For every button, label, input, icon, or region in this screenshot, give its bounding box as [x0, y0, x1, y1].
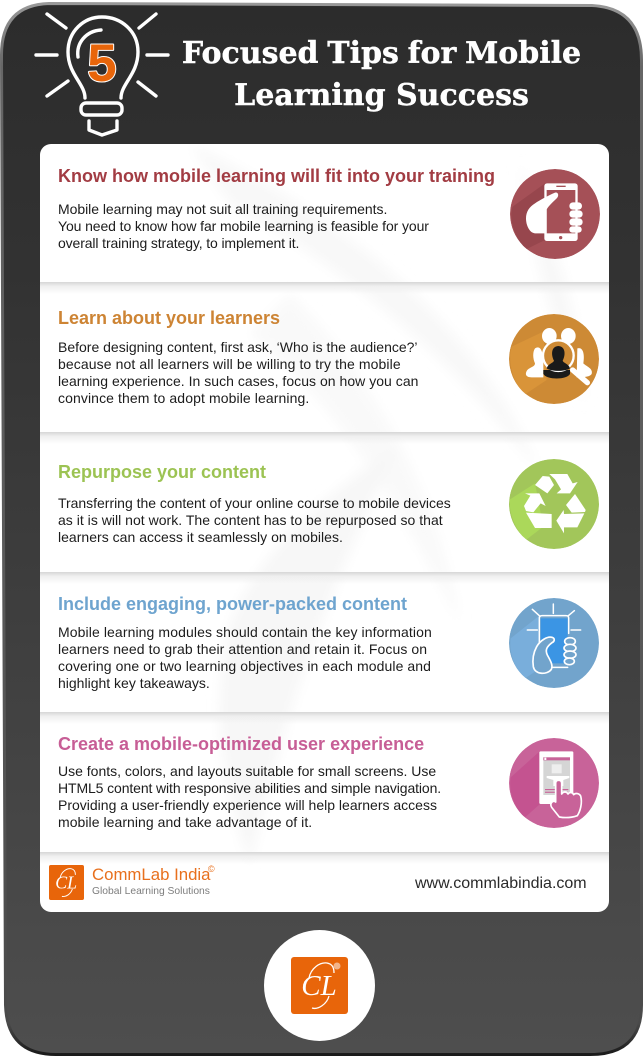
heading: tip 2: Learn about your learners — [58, 308, 280, 328]
heading: tip 1: Know how mobile learning will fit into your training — [58, 166, 495, 186]
text: tip 5: HTML5 content with responsive abilities and simple navigation. — [58, 780, 441, 796]
text: tip 3: learners can access it seamlessly on mobiles. — [58, 529, 343, 545]
panel: tip 3 — [58, 462, 451, 545]
title: Focused Tips for Mobile — [182, 36, 581, 71]
icon: light bulb with number 5 — [34, 12, 170, 137]
text: tip 1 — [58, 201, 429, 251]
icon: recycle — [509, 459, 599, 549]
company name: CommLab India — [92, 865, 210, 884]
text: tip 5: Providing a user-friendly experience will help learners access — [58, 797, 437, 813]
text: tip 4: highlight key takeaways. — [58, 675, 210, 691]
icon: light bulb with number 5: 5 — [87, 34, 117, 93]
text: tip 3 — [58, 495, 451, 545]
tagline: Global Learning Solutions — [92, 886, 210, 897]
home button with logo: CL — [301, 970, 337, 1002]
text: tip 2: convince them to adopt mobile learning. — [58, 390, 309, 406]
logo mark: CL — [55, 872, 77, 892]
icon: hand holding phone — [510, 169, 600, 259]
footer logo — [49, 864, 215, 900]
text: tip 2 — [58, 339, 418, 406]
text: tip 4: Mobile learning modules should contain the key information — [58, 624, 432, 640]
home button with logo — [264, 930, 375, 1041]
text: tip 5: Use fonts, colors, and layouts suitable for small screens. Use — [58, 763, 436, 779]
panel: tip 5 — [58, 734, 441, 830]
copyright mark: © — [208, 864, 215, 874]
title — [182, 36, 581, 113]
text: tip 4: covering one or two learning objectives in each module and — [58, 658, 431, 674]
text: tip 3: Transferring the content of your online course to mobile devices — [58, 495, 451, 511]
panel: tip 2 — [58, 308, 418, 406]
content panel — [40, 144, 609, 912]
text: tip 4: learners need to grab their attention and retain it. Focus on — [58, 641, 427, 657]
text: tip 2: Before designing content, first ask, ‘Who is the audience?’ — [58, 339, 418, 355]
panel: tip 4 — [58, 594, 432, 691]
logo mark — [49, 865, 84, 900]
heading: tip 3: Repurpose your content — [58, 462, 266, 482]
heading: tip 4: Include engaging, power-packed content — [58, 594, 407, 614]
text: tip 2: because not all learners will be willing to try the mobile — [58, 356, 401, 372]
icon: phone with glow and hand — [509, 598, 599, 688]
text: tip 4 — [58, 624, 432, 691]
icon: touch screen phone — [509, 738, 599, 828]
text: tip 5 — [58, 763, 441, 830]
text: tip 5: mobile learning and take advantage of it. — [58, 814, 312, 830]
text: tip 2: learning experience. In such cases, focus on how you can — [58, 373, 418, 389]
website url: www.commlabindia.com — [415, 875, 587, 892]
panel: tip 1 — [58, 166, 495, 251]
title: Learning Success — [234, 78, 529, 113]
heading: tip 5: Create a mobile-optimized user experience — [58, 734, 424, 754]
icon: audience magnifier — [509, 314, 599, 404]
text: tip 1: overall training strategy, to implement it. — [58, 235, 299, 251]
text: tip 3: as it is will not work. The content has to be repurposed so that — [58, 512, 443, 528]
text: tip 1: You need to know how far mobile learning is feasible for your — [58, 218, 429, 234]
text: tip 1: Mobile learning may not suit all training requirements. — [58, 201, 387, 217]
